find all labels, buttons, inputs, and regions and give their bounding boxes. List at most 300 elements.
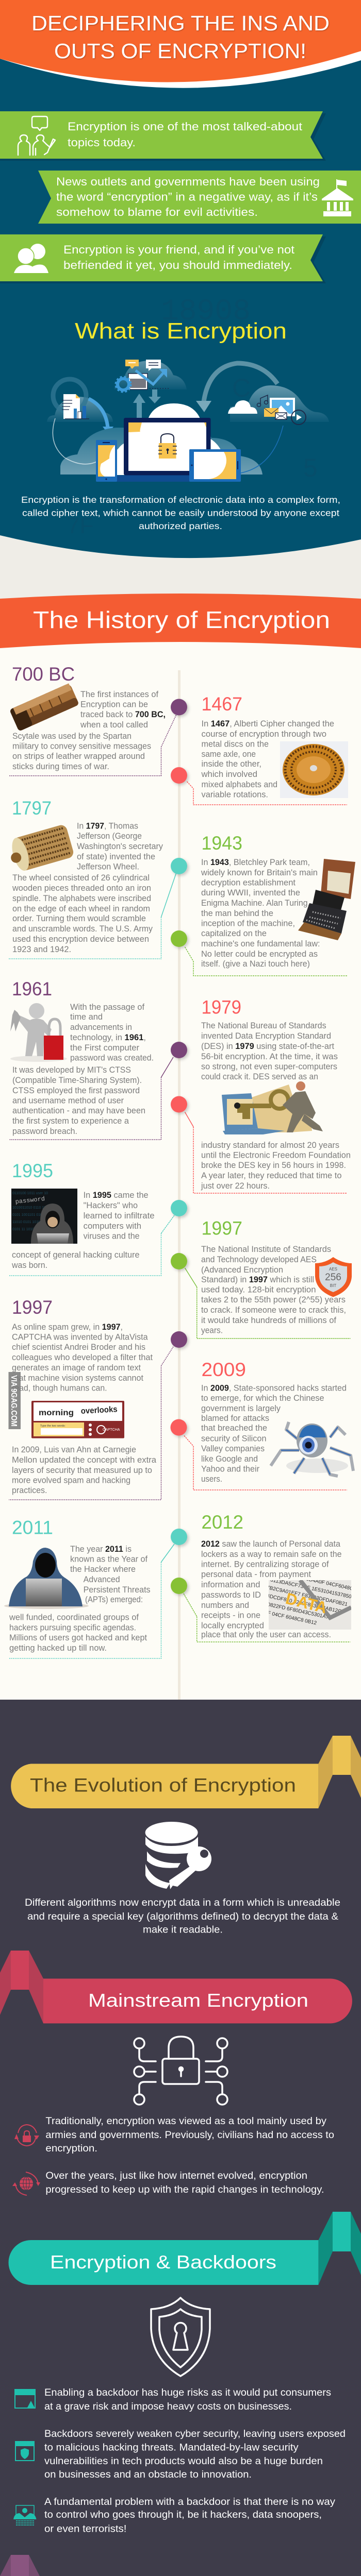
timeline item: 1961 [9,978,187,1140]
arrow: thin white loop [53,418,106,464]
year: 2009 [201,1359,246,1380]
text: used this encryption device between [12,934,149,944]
text: practices. [12,1485,47,1495]
text: of state) invented the [77,852,155,861]
timeline item: 1943 [171,833,355,976]
connector [9,715,176,776]
year: 1979 [201,996,241,1018]
dot [171,767,187,784]
text: In 2009, Luis van Ahn at Carnegie [12,1445,136,1454]
text above image: could crack it. DES served as an [201,1072,318,1081]
text below image: A year later, they reduced that time to [201,1171,341,1180]
text: The wheel consisted of 26 cylindrical [12,873,150,883]
text: evolution description: make it readable. [143,1924,223,1935]
text [45,2171,324,2195]
ribbon: encryption and backdoors [9,2212,361,2285]
text: sticks during times of war. [12,761,109,771]
text: like Google and [201,1454,258,1464]
cloud: media [230,385,329,422]
year: 1961 [12,978,52,999]
text: Traditionally, encryption was viewed as a tool mainly used by [45,2116,327,2127]
calendar and gear [116,374,147,392]
text: traced back to 700 BC, [80,709,166,719]
document with charts [62,394,89,419]
text: The year 2011 is [70,1544,132,1554]
year: 2012 [201,1512,243,1533]
big faded return arrow [204,363,277,402]
text: Standard) in 1997 which is still [201,1275,314,1284]
text: mixed alphabets and [201,779,277,789]
text: and unscramble words. The U.S. Army [12,924,153,934]
icon: people talking [18,116,55,155]
text: personal data - from payment [201,1569,311,1579]
timeline item: 1997 CAPTCHA [8,1297,187,1500]
icon: AES 256 shield: 256 [325,1272,341,1283]
text: Backdoors severely weaken cyber security, leaving users exposed [44,2429,346,2439]
ribbon: mainstream encryption [0,1951,352,2023]
text: information and [201,1580,260,1589]
image: hooded hacker at laptop [4,1548,89,1609]
text: concept of general hacking culture [12,1250,139,1260]
connector [185,1112,193,1127]
faint background digits: 18908 [161,295,251,329]
text [201,719,334,800]
text: machine's one fundamental law: [201,939,320,948]
text [56,175,320,218]
text: encryption. [45,2143,97,2154]
text: A fundamental problem with a backdoor is that there is no way [44,2497,336,2507]
text [201,1383,347,1484]
text: known as the Year of [70,1554,147,1564]
connector [161,1544,174,1562]
connector [184,1594,197,1617]
line chart arrow [136,370,165,384]
icon: AES 256 shield: BIT [330,1283,336,1288]
text: or even terrorists! [44,2523,127,2535]
text above image: 56-bit encryption. At the time, it was [201,1052,338,1061]
text: that breached the [201,1423,267,1433]
ribbon: the evolution of encryption [11,1736,361,1808]
heading: Mainstream Encryption [88,1990,308,2011]
faint background digits: C [232,374,251,402]
section: cream transition [0,535,361,650]
text: Advanced [84,1574,120,1584]
timeline item: 2009 [170,1359,353,1490]
text: As online spam grew, in 1997, [12,1322,123,1332]
timeline item: 1995 [9,1160,187,1276]
image: data chain: 7A1F 04CF 6048C8 0B12 [258,1608,317,1626]
text: variable rotations. [201,790,268,800]
text: learned to infiltrate [84,1211,155,1221]
faint background digits: 7F [67,513,93,538]
text: to crack. If someone were to crack this, [201,1305,346,1315]
text: Yahoo and their [201,1464,259,1473]
text: Jefferson Wheel. [77,862,139,872]
text: on the edge of each wheel in random [12,904,150,913]
text [44,2497,336,2535]
image: key in laptop [222,1081,323,1134]
image: data chain: 3113DA5CF73CF 1E53104153785053F9 [270,1577,361,1602]
dot [171,1529,187,1545]
text: The first instances of [80,689,158,699]
text: the Hacker where [70,1564,136,1574]
text: CTSS employed the first password [12,1086,140,1095]
banner: news outlets [38,171,361,224]
text: what is encryption definition: Encryption is the transformation of electronic data into a complex form, [21,495,340,505]
dot [171,1331,187,1348]
text: Enigma Machine. Alan Turing, [201,898,310,908]
text above image: so strong, not even super-computers [201,1061,337,1072]
text [201,1539,341,1639]
image: jefferson wheel [6,824,75,873]
text: In 2009, State-sponsored hacks started [201,1383,347,1393]
cloud: large back [60,428,262,474]
small white cloud [228,400,257,414]
text: takes 2 to the 55th power (2^55) years [201,1295,346,1304]
year: 1997 [12,1297,53,1318]
text [12,1002,154,1136]
faint background digits [67,295,318,538]
text: during WWII, invented the [201,888,300,897]
text [12,821,163,954]
text: to malicious hacking threats. Mandated-by-law security [44,2442,299,2453]
icon: two friends [14,244,48,273]
year: 1997 [201,1218,242,1239]
text: (APTs) emerged: [85,1595,143,1604]
text: In 1797, Thomas [77,821,138,831]
connector [161,1057,173,1077]
image: data chain: 2E0822FD 6F80D43C5301A7 [260,1601,330,1620]
text: what is encryption definition: called cipher text, which cannot be easily understood by anyone except [22,508,339,518]
title [31,11,330,63]
text: place that only the user can access. [201,1630,331,1639]
text: years. [201,1325,223,1335]
text [63,243,294,272]
text: News outlets and governments have been using [56,175,320,188]
text: to control who goes through it, be it hackers, data snoopers, [44,2510,322,2520]
text below image: industry standard for almost 20 years [201,1140,339,1150]
text: military to convey sensitive messages [12,741,151,751]
text: Persistent Threats [84,1585,151,1595]
dot [171,930,187,947]
text: armies and governments. Previously, civilians had no access to [45,2130,334,2141]
heading: Encryption & Backdoors [50,2251,276,2273]
text below image: just over 22 hours. [201,1181,270,1191]
image: hacker with password screen: 0101 1001101 0101101 [12,1213,50,1217]
banner: your friend [0,234,326,283]
chat bubbles [125,360,161,371]
white cloud behind laptop [111,403,225,475]
text: Washington's secretary [77,841,163,851]
timeline item: 1997 AES [171,1218,352,1338]
image: CAPTCHA [31,1401,124,1438]
text: inside the other, [201,759,261,769]
text above image: invented Data Encryption Standard [201,1031,331,1041]
connector [184,1435,347,1490]
dot [171,1042,187,1058]
text: somehow to blame for evil activities. [56,206,258,218]
timeline item: 2011 [4,1517,187,1658]
text: wooden pieces threaded onto an iron [12,883,151,893]
text: hackers pursuing specific agendas. [9,1623,136,1632]
text: itself. (give a Nazi touch here) [201,959,310,969]
ribbon: encryption and purevpn [0,2555,353,2576]
dot [171,858,187,874]
phone [96,440,117,482]
text below image: until the Electronic Freedom Foundation [201,1150,351,1160]
text below image [201,1140,351,1191]
icon: browser warning [15,2389,35,2409]
image: CAPTCHA: Type the two words: [40,1425,65,1428]
text: "Hackers" who [84,1200,138,1210]
connector [185,1268,197,1287]
text: befriended it yet, you should immediately. [63,259,292,272]
text: CAPTCHA was invented by AltaVista [12,1332,148,1342]
text: Encryption is your friend, and if you’ve not [63,243,294,256]
text: blamed for attacks [201,1413,269,1423]
text: at a grave risk and impose heavy costs on businesses. [44,2401,292,2412]
text: internet. By centralizing storage of [201,1559,329,1569]
image: hacker with password screen: password [15,1195,45,1206]
text: time and [70,1012,103,1022]
point: fundamental problem [13,2497,336,2535]
connector [161,1215,174,1233]
text: users. [201,1474,222,1484]
text: Encryption is one of the most talked-about [68,120,302,133]
cloud: documents [47,397,113,422]
thin blue arrow [241,426,283,473]
text: Mellon updated the concept with extra [12,1455,157,1465]
dot [171,1200,187,1216]
text: on strips of leather wrapped around [12,751,145,761]
text: It was developed by MIT's CTSS [12,1065,131,1075]
image: CAPTCHA: overlooks [80,1405,118,1416]
laptop [111,418,210,482]
text: used today. 128-bit encryption [201,1285,316,1294]
text: to emerge, for which the Chinese [201,1393,324,1403]
timeline center line [178,670,180,1700]
text: password breach. [12,1126,77,1136]
text: Jefferson (George [77,831,142,841]
image: data chain [269,1580,351,1630]
text: Over the years, just like how internet evolved, encryption [45,2171,307,2181]
arrows: up and down [133,389,161,418]
timeline item: 1797 [6,798,187,959]
heading text: The History of Encryption [33,606,330,633]
text above image: (DES) in 1979 using state-of-the-art [201,1041,334,1051]
text: course of encryption through two [201,729,326,739]
image: scytale [9,683,79,732]
year: 1467 [201,693,242,715]
text: spindle. The alphabets were inscribed [12,893,151,903]
dot [171,1096,187,1113]
text [44,2429,346,2480]
dot [171,1253,187,1269]
text: vulnerabilities in tech products would also be a huge burden [44,2456,323,2467]
header: orange title band [0,0,361,88]
point: traditionally [14,2116,334,2154]
point: enabling a backdoor [15,2387,331,2412]
text: government is largely [201,1403,281,1413]
icon: AES 256 shield: AES [329,1267,337,1272]
image: CAPTCHA: CAPTCHA [103,1428,120,1432]
text: The National Institute of Standards [201,1244,331,1254]
text [12,689,166,771]
text: the man behind the [201,908,273,918]
text: that machine vision systems cannot [12,1373,143,1383]
year: 1995 [12,1160,53,1181]
text: In 1467, Alberti Cipher changed the [201,719,334,728]
section: dark blue background [0,0,361,572]
image: data chain: 94DCDF810 8220F833F6BAB12C9 [264,1592,345,1615]
text: the word “encryption” in a negative way, as if it’s [56,191,318,203]
image: figure with key and lock [10,1003,67,1062]
cloud: top [114,361,187,389]
text: progressed to keep up with the rapid changes in technology. [45,2184,324,2195]
dot [171,699,187,715]
image: hacker with password screen: 11010 0101 1010011 [12,1221,46,1224]
text: viruses and the [84,1231,140,1241]
text: advancements in [70,1022,132,1032]
text: well funded, coordinated groups of [9,1613,139,1622]
text: authentication - and may have been [12,1106,145,1115]
text: lockers as a way to remain safe on the [201,1549,341,1559]
text [201,1244,346,1335]
text: No letter could be encrypted as [201,949,318,959]
icon: rotating lock [14,2125,39,2146]
text: on businesses and an obstacle to innovation. [44,2469,252,2480]
text: was born. [11,1260,47,1270]
text: layers of security that measured up to [12,1465,152,1475]
image: enigma machine [298,859,355,940]
text: receipts - in one [201,1611,260,1620]
text: and Technology developed AES [201,1255,317,1264]
text above image [201,1021,338,1081]
text: inception of the machine, [201,918,295,928]
connector [187,782,347,805]
text: technology, in 1961, [70,1032,146,1042]
connector [9,1347,173,1500]
text: when a tool called [80,720,148,730]
text: (Advanced Encryption [201,1265,283,1275]
icon: browser shield [15,2442,34,2461]
image: hacker with password screen: 0101 11 101001 [12,1228,38,1231]
heading band: the history of encryption [0,594,361,648]
text: decryption establishment [201,878,296,887]
text: getting hacked up till now. [9,1643,107,1653]
text: Encryption can be [80,700,148,709]
image: hacker with password screen [11,1189,77,1244]
text [12,1322,153,1393]
timeline item: 2012 [171,1512,361,1642]
image: data chain: DATA [284,1589,329,1617]
text: With the passage of [70,1002,144,1012]
icon: hacker at keyboard [13,2505,36,2525]
text: the first system to experience a [12,1116,129,1126]
text above image: The National Bureau of Standards [201,1021,326,1030]
tablet [189,449,241,482]
text: Enabling a backdoor has huge risks as it would put consumers [44,2387,331,2398]
text: Valley companies [201,1444,265,1453]
text: In 1943, Bletchley Park team, [201,857,310,867]
text: security of Silicon [201,1433,266,1444]
text: numbers and [201,1600,249,1610]
icon: rotating globe [12,2172,40,2195]
timeline item: 700 BC [9,664,187,776]
text: chief scientist Andrei Broder and his [12,1342,145,1352]
text: locally encrypted [201,1621,264,1630]
image: hacker with password screen: 0110100 1011 user 10 [12,1192,48,1195]
text [44,2387,331,2412]
text: evolution description: and require a special key (algorithms defined) to decrypt the data & [27,1911,338,1922]
heading: The Evolution of Encryption [30,1775,296,1796]
point: backdoors weaken security [15,2429,346,2480]
year: 2011 [12,1517,53,1538]
text: which involved [201,769,257,779]
text: computers with [84,1221,141,1231]
faint background digits: 5 [303,453,318,482]
image: CAPTCHA: morning [39,1409,74,1417]
year: 700 BC [12,664,75,685]
icon: shield with keyhole [151,2298,210,2376]
image: hacker with password screen: 1010011010 0110 10110 [12,1206,52,1210]
heading: what is encryption: What is Encryption [75,318,287,344]
text: In 1995 came the [84,1190,149,1200]
watermark: 9GAG [8,1372,21,1429]
text: order. Turning them would scramble [12,913,146,923]
text [45,2116,334,2154]
text [12,1445,157,1495]
banner: most talked about [0,111,326,161]
image: cipher disc [280,741,348,798]
watermark: 9GAG: VIA 9GAG.COM [9,1375,18,1427]
text: 1923 and 1942. [12,944,71,954]
image: spy eye spider [271,1422,353,1476]
text: 2012 saw the launch of Personal data [201,1539,341,1549]
icon: circuit padlock [134,2037,227,2105]
text below image: broke the DES key in 56 hours in 1998. [201,1160,346,1170]
title: OUTS OF ENCRYPTION! [54,39,306,63]
connector [161,873,176,917]
dot [170,1419,187,1436]
text: more evolved spam and hacking [12,1476,130,1485]
section: dark background [0,1700,361,2576]
text: evolution description [25,1897,340,1935]
text: what is encryption definition [21,495,340,531]
text: Scytale was used by the Spartan [12,731,132,741]
text [9,1544,151,1653]
text: Millions of users got hacked and kept [9,1633,147,1642]
text: widely known for Britain's main [201,868,318,877]
title: DECIPHERING THE INS AND [31,11,330,35]
text: metal discs on the [201,739,269,749]
image: data chain: 7B2C9A01EF7 F83263DFDAF0B21 [266,1585,348,1607]
arrow: document to device [89,399,108,428]
text [11,1190,155,1270]
year: 1943 [201,833,242,854]
text: read, though humans can. [12,1383,107,1393]
point: over the years [12,2171,324,2195]
text: generates an image of random text [12,1363,141,1372]
text: evolution description: Different algorithms now encrypt data in a form which is unreadable [25,1897,340,1908]
text: (Compatible Time-Sharing System). [12,1075,142,1085]
text: passwords to ID [201,1590,261,1600]
illustration: cloud encryption [47,360,329,482]
section: timeline background [0,639,361,1700]
icon: government building [322,179,353,216]
text: same axle, one [201,749,256,759]
icon: AES 256 shield [315,1257,352,1297]
